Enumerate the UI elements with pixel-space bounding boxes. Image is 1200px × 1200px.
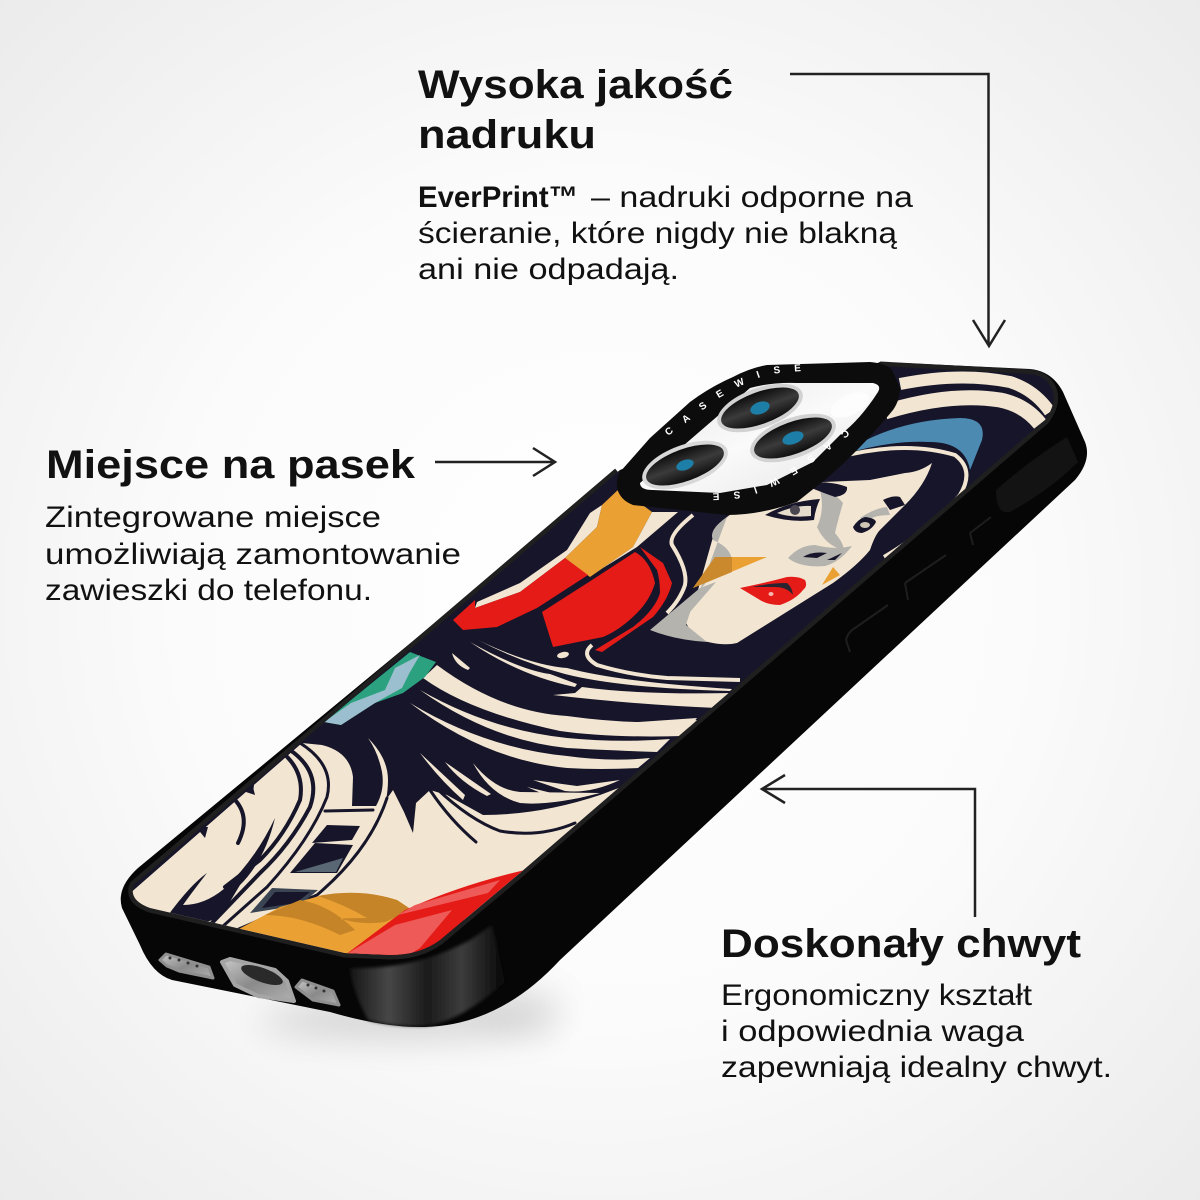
text: print quality: ani nie odpadają. [418, 253, 679, 286]
eye whites [777, 505, 870, 528]
orange headphone panel [565, 488, 652, 577]
ring lettering: CASEWISE [713, 430, 849, 500]
side buttons [846, 517, 991, 652]
case body [121, 362, 1087, 1027]
helmet arcs [885, 377, 1050, 424]
text: strap slot: Zintegrowane miejsce [45, 501, 381, 534]
face outline arc [839, 448, 966, 557]
side pad [996, 437, 1078, 512]
text: grip: Ergonomiczny kształt [721, 979, 1033, 1012]
ring lettering: CASEWISE [665, 364, 801, 435]
earth water [324, 655, 420, 725]
blue band [845, 418, 983, 470]
orange planet [237, 893, 412, 957]
phone shadow [260, 985, 565, 1038]
flash [827, 387, 873, 423]
charging port [222, 959, 294, 1001]
hair stripes [410, 640, 733, 804]
callout: grip [721, 922, 1112, 1084]
glossy corner [350, 925, 505, 1026]
arrow: strap slot [435, 448, 555, 476]
heading: print quality [418, 63, 733, 157]
speaker dots [168, 956, 326, 992]
headphone crescent [475, 505, 602, 608]
heading: grip: Doskonały chwyt [721, 922, 1081, 966]
callout: strap slot [45, 443, 461, 607]
red headphone left [453, 558, 588, 630]
heading: print quality: Wysoka jakość [418, 63, 733, 107]
text: print quality: EverPrint™ [418, 181, 578, 214]
red planet [345, 870, 525, 960]
cream headphone panel [596, 512, 678, 573]
rim band [133, 366, 1054, 955]
heading: print quality: nadruku [418, 113, 596, 157]
face shadows [650, 490, 890, 642]
camera ring [617, 362, 900, 515]
text: grip [721, 979, 1112, 1084]
earth [324, 652, 436, 725]
suit windows [250, 825, 360, 913]
red headphone cup [542, 552, 655, 647]
camera module [616, 362, 900, 515]
suit lines [210, 743, 575, 932]
arrow: grip [762, 775, 975, 917]
right speaker [296, 980, 339, 1005]
text: print quality: ścieranie, które nigdy nie blakną [418, 217, 897, 250]
text: strap slot [45, 501, 461, 607]
text: strap slot: umożliwiają zamontowanie [45, 538, 461, 571]
text: strap slot: zawieszki do telefonu. [45, 574, 372, 607]
heading: strap slot: Miejsce na pasek [46, 443, 416, 487]
red planet stripes [345, 880, 500, 960]
orange facial triangles [693, 557, 840, 588]
lens left [636, 431, 734, 499]
red headphone arc [595, 547, 672, 652]
text: print quality [418, 181, 913, 286]
charging opening [239, 961, 285, 989]
hair line [667, 515, 693, 613]
arrow: print quality [790, 74, 1005, 346]
ring lettering [665, 364, 849, 500]
text: print quality: – nadruki odporne na [591, 181, 913, 214]
bottom ports [160, 954, 339, 1005]
left speaker [160, 954, 213, 978]
artwork [132, 366, 1054, 955]
suit fills and spikes [166, 785, 275, 922]
lips [740, 577, 806, 605]
text: grip: zapewniają idealny chwyt. [721, 1051, 1112, 1084]
lens top [711, 374, 809, 442]
camera plate [640, 383, 879, 493]
suit [132, 738, 618, 954]
eyes, brow and nose [765, 482, 905, 560]
lens right [744, 404, 842, 472]
text: grip: i odpowiednia waga [721, 1015, 1024, 1048]
cream dot [557, 652, 569, 658]
orange planet stripes [265, 893, 412, 935]
callout: print quality [418, 63, 913, 286]
face [686, 463, 932, 644]
phone case illustration [120, 362, 1088, 1029]
cream hair curve [587, 645, 740, 680]
